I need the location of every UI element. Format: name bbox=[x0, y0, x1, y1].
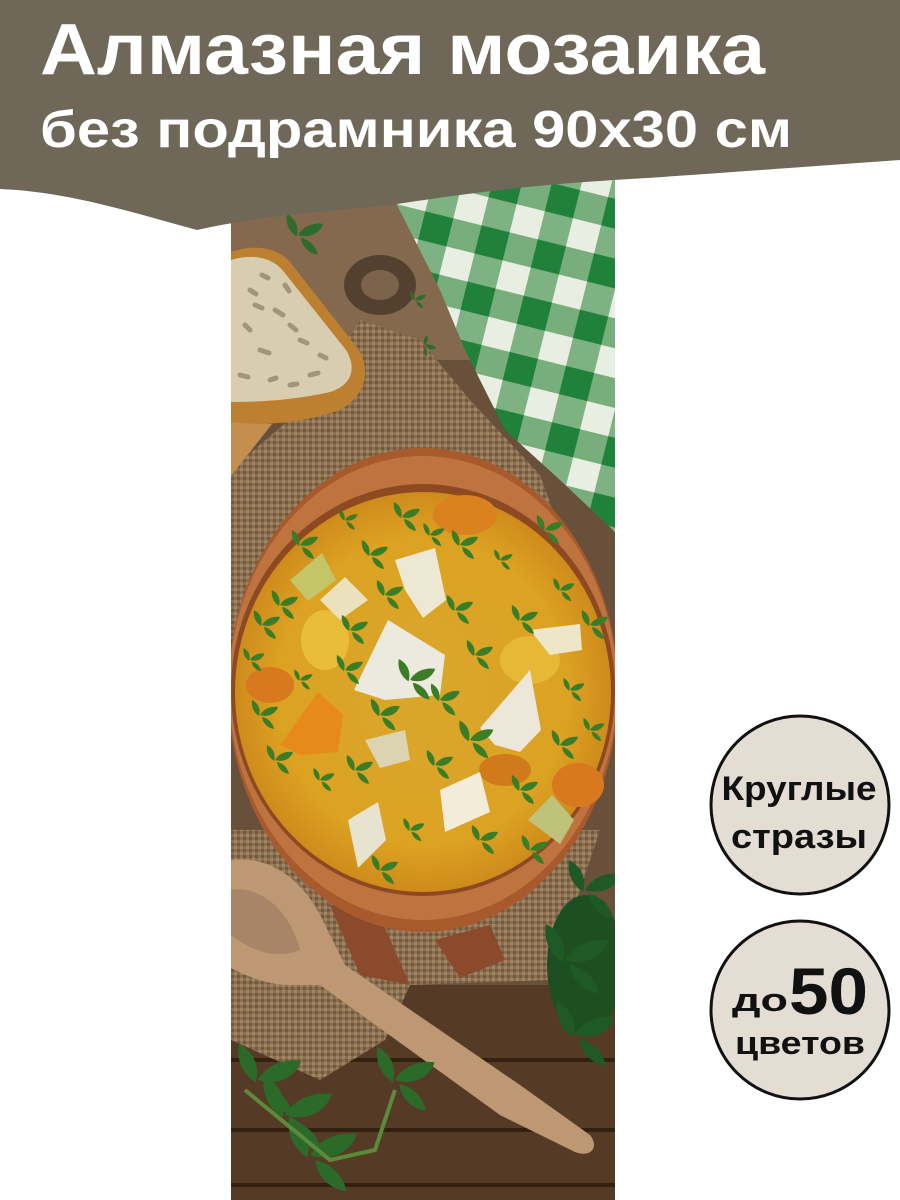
badge: round rhinestones: стразы bbox=[731, 818, 867, 856]
burlap cloth bottom bbox=[231, 830, 600, 1080]
parsley top bbox=[286, 214, 439, 358]
badge: round rhinestones: Круглые bbox=[722, 770, 876, 808]
parsley right bbox=[545, 860, 623, 1066]
badge: up to 50 colours bbox=[711, 921, 889, 1099]
header banner bbox=[0, 0, 900, 230]
wooden table background bbox=[231, 170, 615, 1200]
picture: soup bowl on wooden table bbox=[228, 170, 623, 1200]
badge: up to 50 colours: до bbox=[732, 982, 788, 1018]
bread slice front bbox=[231, 248, 365, 424]
soup bbox=[235, 492, 611, 892]
parsley bottom left bbox=[238, 1044, 435, 1191]
checked napkin bbox=[396, 170, 615, 532]
herbs on soup bbox=[243, 502, 608, 884]
bread slice back bbox=[231, 420, 272, 476]
red woven stripe bbox=[330, 905, 505, 985]
badge: up to 50 colours: 50 bbox=[789, 954, 868, 1028]
wooden spoon bbox=[231, 859, 594, 1154]
subtitle: без подрамника 90х30 см bbox=[40, 101, 792, 159]
vegetables and fish bbox=[246, 495, 604, 868]
title: Алмазная мозаика bbox=[40, 10, 766, 90]
burlap cloth top bbox=[231, 320, 552, 640]
bowl bbox=[228, 448, 618, 932]
badge: up to 50 colours: цветов bbox=[735, 1025, 865, 1061]
badge: round rhinestones bbox=[711, 716, 889, 894]
